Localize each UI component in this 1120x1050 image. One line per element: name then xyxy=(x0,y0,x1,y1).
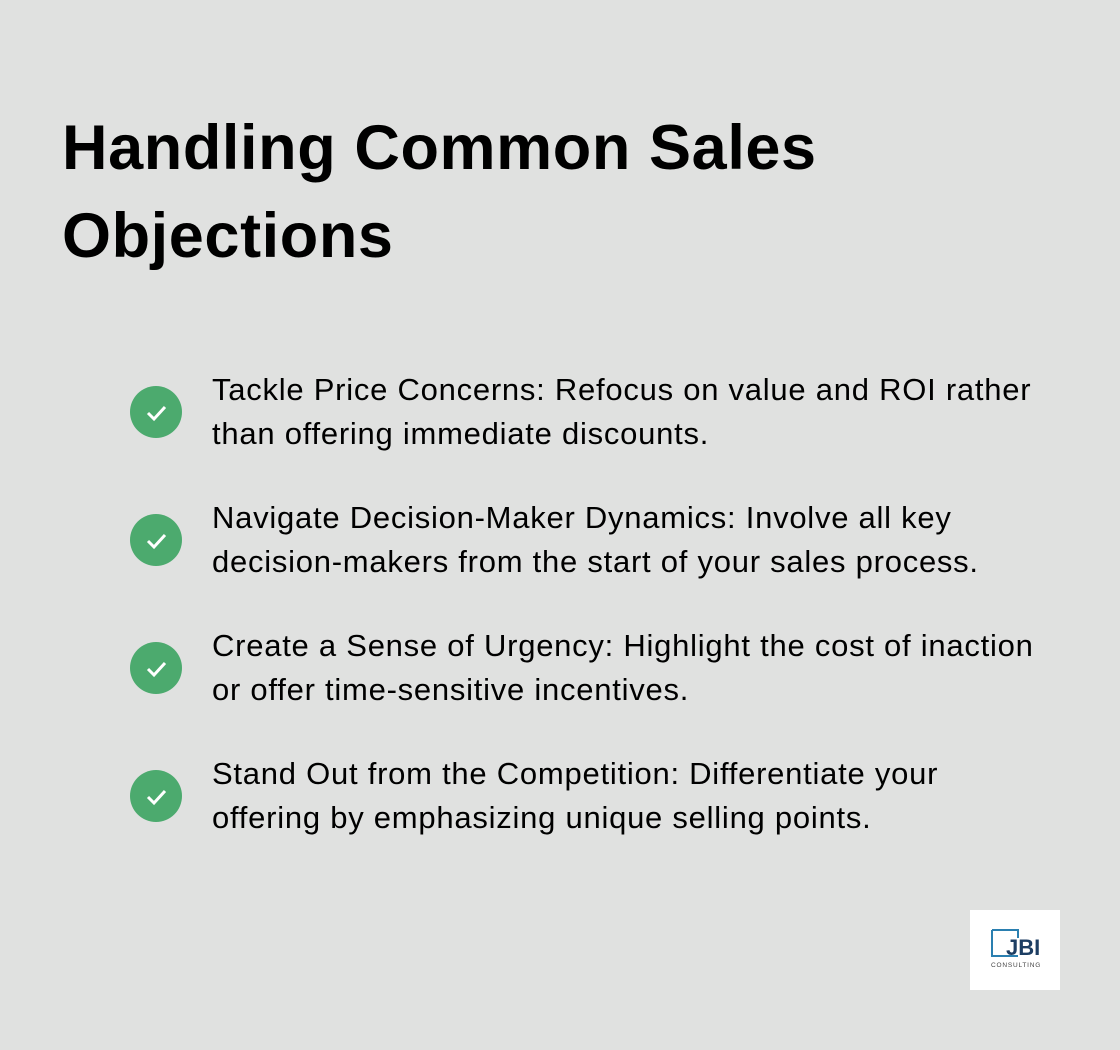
title xyxy=(62,113,817,271)
item: decision makers xyxy=(130,500,979,579)
text: competition: offering by emphasizing unique selling points. xyxy=(212,800,872,835)
logo xyxy=(970,910,1060,990)
icon: check xyxy=(130,386,182,438)
text: competition xyxy=(212,756,938,835)
logo: CONSULTING xyxy=(991,962,1041,969)
item: competition xyxy=(130,756,938,835)
title: Objections xyxy=(62,201,394,271)
text: price: than offering immediate discounts. xyxy=(212,416,709,451)
logo: JBI xyxy=(1006,935,1040,960)
text: urgency: Create a Sense of Urgency: Highlight the cost of inaction xyxy=(212,628,1034,663)
icon: check xyxy=(130,770,182,822)
title: Handling Common Sales xyxy=(62,113,817,183)
text: price xyxy=(212,372,1031,451)
item: urgency xyxy=(130,628,1034,707)
text: price: Tackle Price Concerns: Refocus on value and ROI rather xyxy=(212,372,1031,407)
icon: check xyxy=(130,514,182,566)
text: urgency xyxy=(212,628,1034,707)
text: decision makers: decision-makers from the start of your sales process. xyxy=(212,544,979,579)
text: decision makers: Navigate Decision-Maker Dynamics: Involve all key xyxy=(212,500,952,535)
icon: check xyxy=(130,642,182,694)
item: price xyxy=(130,372,1031,451)
text: urgency: or offer time-sensitive incentives. xyxy=(212,672,689,707)
text: decision makers xyxy=(212,500,979,579)
text: competition: Stand Out from the Competition: Differentiate your xyxy=(212,756,938,791)
